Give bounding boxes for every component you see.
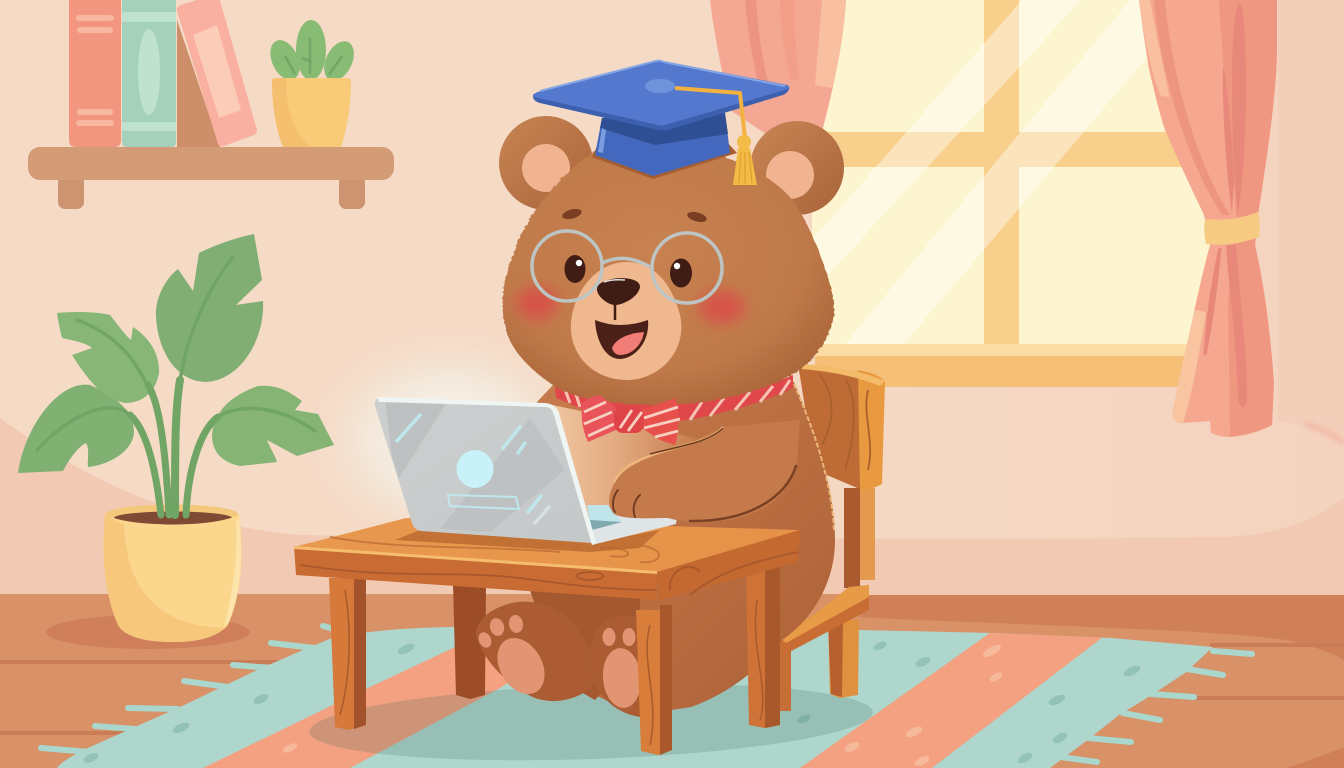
- bear head group: [499, 60, 844, 445]
- bear arm and paw: [609, 420, 800, 522]
- window sill: [815, 344, 1187, 387]
- chair back: [798, 364, 885, 490]
- cap board: [533, 60, 789, 130]
- large potted plant: [18, 234, 334, 649]
- nose: [597, 278, 640, 320]
- light beams: [812, 0, 1170, 344]
- books: [69, 0, 257, 147]
- right foot: [590, 615, 660, 717]
- laptop lid: [375, 398, 592, 543]
- small potted plant: [265, 20, 360, 147]
- pot: [104, 514, 242, 642]
- head: [503, 147, 834, 405]
- table top surface: [294, 518, 800, 572]
- table side edge: [657, 530, 800, 600]
- laptop base: [587, 505, 677, 545]
- bear body: [530, 382, 835, 715]
- cap button: [645, 79, 675, 93]
- window panes: [812, 0, 1217, 344]
- eyebrows: [561, 207, 708, 224]
- curtain tie: [1204, 212, 1260, 245]
- collar scarf: [555, 375, 793, 421]
- ears: [499, 116, 844, 215]
- cap base: [595, 113, 730, 176]
- leaves and stems: [18, 234, 334, 515]
- table front edge: [294, 546, 657, 600]
- table legs: [329, 565, 780, 755]
- tassel cord: [675, 88, 745, 138]
- tassel: [733, 135, 757, 185]
- window: [812, 0, 1217, 387]
- right side fur: [794, 384, 834, 530]
- pot rim and soil: [106, 504, 238, 524]
- graduation cap: [533, 60, 789, 185]
- left foot: [476, 602, 597, 702]
- laptop: [375, 397, 677, 552]
- table shadow on rug: [308, 675, 874, 768]
- left curtain: [710, 0, 846, 150]
- mouth: [595, 320, 648, 359]
- laptop glow: [300, 325, 600, 555]
- screen icon: [448, 450, 519, 509]
- right curtain: [1139, 0, 1277, 437]
- glass streaks: [397, 415, 549, 523]
- glasses: [532, 231, 722, 303]
- chair post: [844, 488, 875, 588]
- torso: [530, 382, 835, 715]
- striped rug: [57, 627, 1213, 768]
- rug fringe: [41, 626, 1252, 762]
- eyes: [564, 255, 692, 288]
- bow tie: [582, 395, 680, 445]
- chair seat: [780, 585, 869, 657]
- chest highlight: [548, 404, 700, 515]
- pot shadow: [46, 615, 250, 649]
- cheeks: [516, 286, 745, 324]
- wooden table: [294, 518, 800, 755]
- bear legs and feet: [476, 590, 660, 717]
- table back leg: [453, 585, 486, 699]
- wall background: [0, 0, 1344, 600]
- wooden chair: [780, 364, 885, 711]
- chair legs: [780, 620, 859, 711]
- muzzle: [571, 262, 681, 380]
- wall shelf: [28, 0, 394, 209]
- floor: [0, 594, 1344, 768]
